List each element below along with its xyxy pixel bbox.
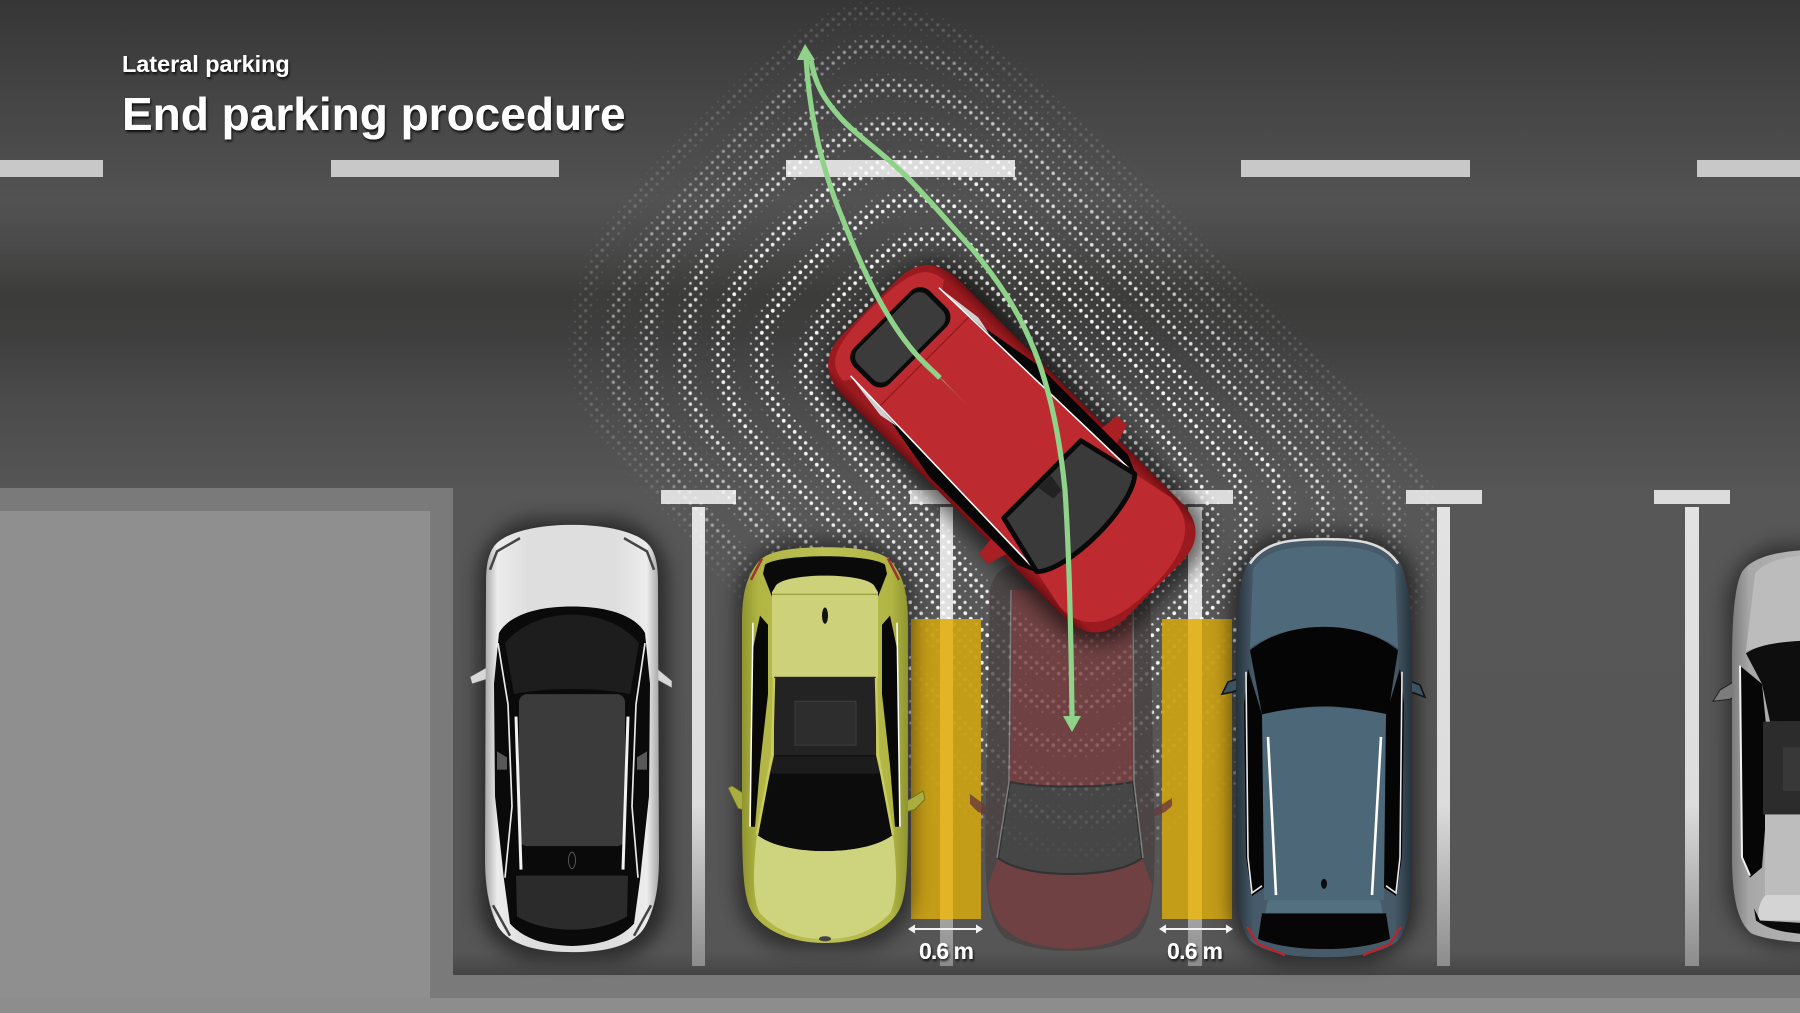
grey parked car, cropped at right edge — [1713, 544, 1800, 948]
lane dashes — [0, 160, 1800, 177]
arrowhead up — [797, 44, 815, 60]
yellow clearance zone right — [1162, 619, 1232, 919]
green path: reverse arc — [811, 60, 1072, 716]
red car leaving the space — [800, 237, 1223, 660]
subtitle: Lateral parking — [122, 51, 290, 77]
white parked car — [470, 519, 672, 959]
dimension arrow right — [1159, 924, 1233, 934]
kerb and pavement — [0, 488, 1800, 1013]
road background — [0, 0, 1800, 490]
red car shadow — [805, 242, 1227, 664]
arrowhead down — [1063, 716, 1081, 732]
ghost red car: final parked position — [970, 556, 1172, 951]
parking bay markings — [661, 490, 1730, 966]
yellow clearance zone left — [911, 619, 981, 919]
dark blue parked car — [1222, 533, 1425, 963]
parking lot surface — [0, 488, 1800, 976]
dimension label right: 0.6 m — [1167, 938, 1223, 964]
dimension arrow left — [908, 924, 983, 934]
sensor wave dot field — [569, 2, 1434, 862]
green path: forward arc — [806, 57, 977, 415]
dimension label left: 0.6 m — [919, 938, 974, 964]
yellow-green parked car — [728, 541, 925, 949]
title: End parking procedure — [122, 88, 626, 140]
